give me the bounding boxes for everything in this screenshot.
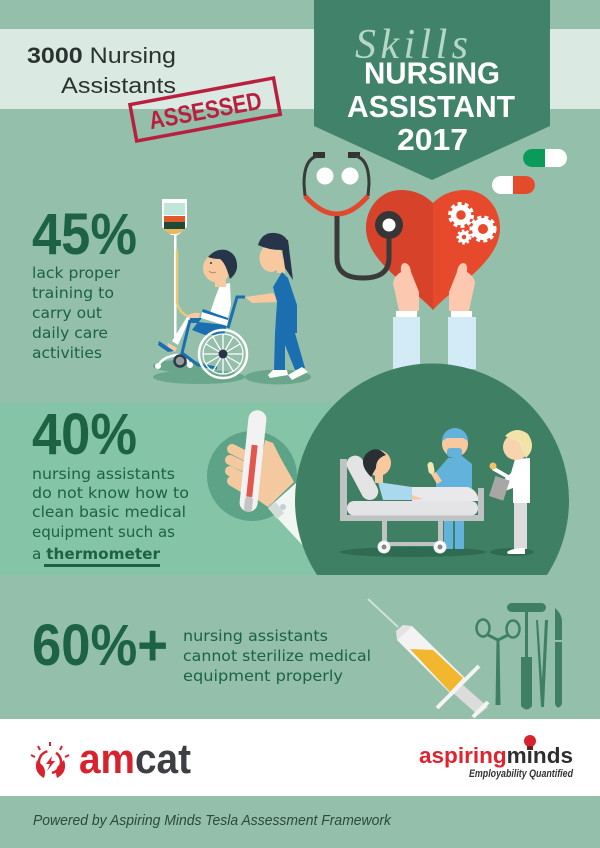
stat: 45 percent: training to: [32, 284, 114, 302]
stat: 40 percent: a thermometer: [32, 545, 160, 563]
logo: aspiring minds: aspiringminds: [419, 743, 573, 768]
icon: syringe: [368, 599, 488, 717]
light header strip: [0, 29, 600, 109]
illustration: wheelchair patient and nurse: [153, 199, 311, 384]
band: 40 percent section: [0, 402, 420, 575]
stat: 40 percent: [32, 402, 189, 567]
stat: 40 percent: nursing assistants: [32, 465, 175, 483]
stat: 45 percent: lack proper: [32, 264, 121, 282]
stat: 60 percent plus: 60%+: [32, 613, 168, 678]
title banner: 2017: [397, 122, 468, 157]
icon: surgical tools: [476, 603, 562, 710]
title banner: Skills: [355, 22, 468, 68]
logo: amcat: amcat: [79, 735, 191, 782]
stat: 60 percent plus: equipment properly: [183, 667, 343, 685]
stat: 45 percent: activities: [32, 344, 102, 362]
icon: hand holding thermometer: [207, 409, 310, 548]
heading: 3000 nursing assistants: Assistants: [61, 73, 176, 98]
stat: 45 percent: 45%: [32, 202, 137, 267]
title banner: NURSING: [364, 56, 500, 90]
heading: 3000 nursing assistants: 3000 Nursing: [27, 43, 176, 68]
stat: 40 percent: do not know how to: [32, 484, 189, 502]
stat: 45 percent: [32, 202, 137, 362]
icon: heart held by hands: [366, 190, 500, 369]
stat: 60 percent plus: cannot sterilize medical: [183, 647, 371, 665]
heading: 3000 nursing assistants: [27, 43, 176, 98]
illustration: hospital bed with patient, nurse and doctor: [340, 428, 534, 557]
logo: aspiring minds: Employability Quantified: [469, 768, 573, 780]
footer credit: Powered by Aspiring Minds Tesla Assessment Framework: [33, 813, 392, 829]
logo: amcat: [31, 735, 191, 782]
footer: white logo band: [0, 719, 600, 796]
stamp: assessed: ASSESSED: [147, 87, 264, 135]
title banner: [314, 0, 550, 180]
stat: 45 percent: carry out: [32, 304, 102, 322]
icon: red pill: [492, 176, 535, 194]
large circle backdrop: [295, 364, 569, 575]
stat: 40 percent: 40%: [32, 402, 137, 467]
title banner: ASSISTANT: [347, 89, 515, 124]
stat: 60 percent plus: [32, 613, 371, 685]
stat: 60 percent plus: nursing assistants: [183, 627, 328, 645]
logo: aspiring minds: [419, 735, 573, 780]
icon: green pill: [523, 149, 567, 167]
stat: 45 percent: daily care: [32, 324, 108, 342]
stat: 40 percent: equipment such as: [32, 523, 175, 541]
stat: 40 percent: clean basic medical: [32, 503, 186, 521]
icon: stethoscope: [304, 152, 403, 278]
